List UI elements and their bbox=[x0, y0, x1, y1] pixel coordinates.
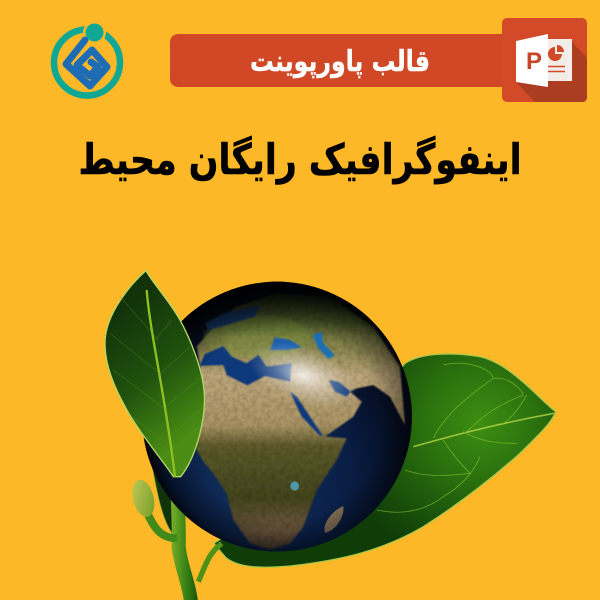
icon lines bbox=[548, 66, 565, 72]
land masses bbox=[197, 293, 405, 549]
seas bbox=[199, 305, 351, 437]
persian gulf bbox=[328, 380, 351, 397]
land texture bbox=[198, 318, 404, 542]
icon: PowerPoint bbox=[502, 18, 587, 102]
main stem bbox=[177, 477, 191, 600]
baltic bbox=[205, 305, 260, 330]
icon letter: P bbox=[526, 48, 542, 75]
title: اینفوگرافیک رایگان محیط bbox=[78, 135, 522, 185]
ocean bbox=[142, 282, 412, 552]
mediterranean bbox=[199, 346, 292, 385]
upright leaf midrib bbox=[147, 290, 175, 477]
big leaf veins bbox=[377, 363, 554, 512]
banner label: قالب پاورپوینت bbox=[250, 44, 430, 79]
black sea bbox=[270, 337, 302, 350]
big leaf blade bbox=[214, 354, 556, 567]
upright leaf veins bbox=[110, 297, 202, 447]
red sea bbox=[290, 392, 323, 437]
plant stem bbox=[129, 460, 222, 600]
bud bbox=[129, 477, 158, 519]
logo ring gap bbox=[83, 21, 106, 44]
illustration: globe and leaves bbox=[105, 271, 556, 600]
icon shadow bbox=[516, 42, 587, 102]
bud stalk bbox=[147, 512, 177, 538]
upright leaf bbox=[105, 271, 204, 477]
globe bbox=[140, 280, 413, 552]
madagascar bbox=[324, 506, 344, 533]
highlight bbox=[252, 344, 354, 405]
icon tile bbox=[502, 18, 587, 102]
banner bar bbox=[170, 34, 515, 87]
icon front page bbox=[516, 34, 548, 87]
banner bbox=[170, 34, 515, 87]
stem to big leaf bbox=[198, 543, 222, 582]
icon back page bbox=[548, 39, 572, 81]
upright leaf blade bbox=[105, 271, 204, 477]
caspian bbox=[313, 332, 335, 359]
big leaf bbox=[214, 354, 556, 567]
green europe tint bbox=[203, 315, 310, 358]
top shading bbox=[183, 282, 378, 334]
logo ring bbox=[54, 30, 120, 96]
icon pie bbox=[548, 45, 564, 61]
globe shading bbox=[142, 282, 412, 552]
logo bbox=[54, 21, 120, 96]
lake bbox=[290, 481, 299, 491]
logo spiral mark bbox=[66, 40, 107, 86]
big leaf midrib bbox=[413, 413, 554, 447]
dark leaflet bbox=[151, 460, 185, 535]
logo dot bbox=[86, 24, 104, 42]
